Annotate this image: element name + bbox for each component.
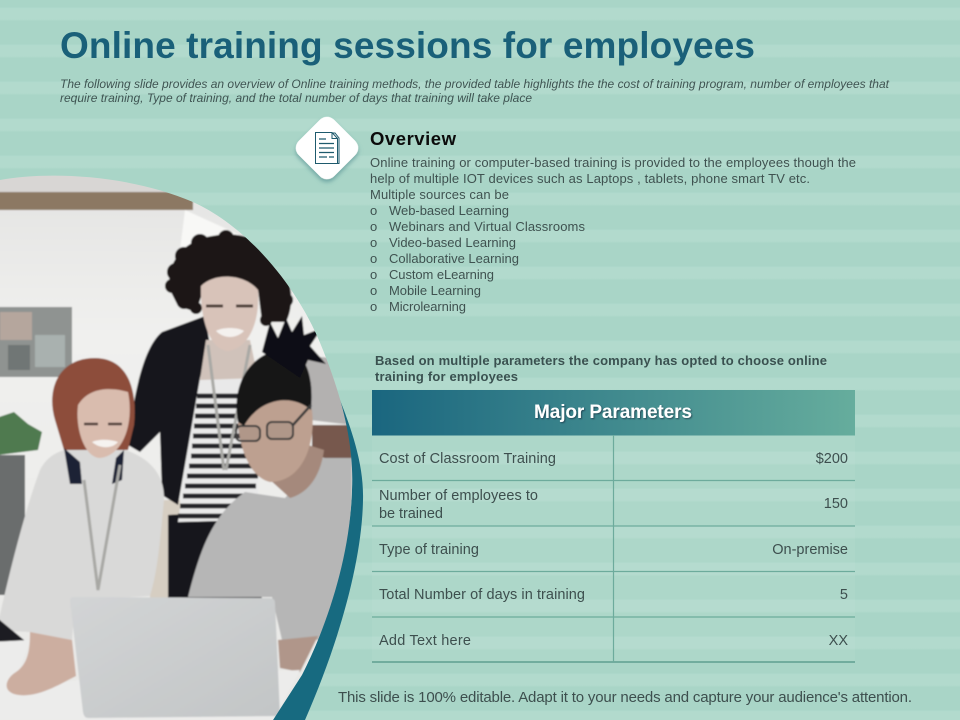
- subtitle description: [60, 77, 890, 105]
- overview text and source list: o: [370, 235, 377, 250]
- table row labels: [379, 451, 585, 649]
- overview text and source list: o: [370, 219, 377, 234]
- overview text and source list: o: [370, 203, 377, 218]
- table row values: 150: [824, 496, 848, 512]
- subtitle description: The following slide provides an overview of Online training methods, the provided table highlights the the cost of training program, number of employees that: [60, 77, 890, 91]
- table intro note: [375, 353, 827, 384]
- table row labels: Total Number of days in training: [379, 587, 585, 603]
- table header: Major Parameters: [534, 402, 692, 423]
- table row labels: be trained: [379, 506, 443, 522]
- overview text and source list: o: [370, 251, 377, 266]
- table row values: $200: [816, 451, 848, 467]
- table intro note: Based on multiple parameters the company has opted to choose online: [375, 353, 827, 368]
- parameters table: [372, 390, 855, 662]
- teal arc behind photo: [273, 395, 363, 720]
- table row labels: Add Text here: [379, 633, 471, 649]
- overview text and source list: o: [370, 267, 377, 282]
- table row values: On-premise: [772, 542, 848, 558]
- table row values: [772, 451, 848, 649]
- table and laptop: [0, 597, 300, 720]
- overview text and source list: Multiple sources can be: [370, 187, 509, 202]
- overview text and source list: help of multiple IOT devices such as Laptops , tablets, phone smart TV etc.: [370, 171, 810, 186]
- overview text and source list: Web-based Learning: [389, 203, 509, 218]
- overview text and source list: Webinars and Virtual Classrooms: [389, 219, 586, 234]
- standing woman: [128, 230, 293, 600]
- title: Online training sessions for employees: [60, 25, 755, 66]
- overview text and source list: o: [370, 283, 377, 298]
- overview text and source list: [370, 155, 856, 314]
- table header: [372, 390, 855, 436]
- overview text and source list: Custom eLearning: [389, 267, 494, 282]
- overview text and source list: Video-based Learning: [389, 235, 516, 250]
- overview heading: Overview: [370, 128, 457, 149]
- table row values: XX: [829, 633, 848, 649]
- overview text and source list: Mobile Learning: [389, 283, 481, 298]
- seated woman: [0, 358, 164, 648]
- table row labels: Type of training: [379, 542, 479, 558]
- overview text and source list: Microlearning: [389, 299, 466, 314]
- overview text and source list: o: [370, 299, 377, 314]
- overview text and source list: Online training or computer-based training is provided to the employees though the: [370, 155, 856, 170]
- footer note: This slide is 100% editable. Adapt it to your needs and capture your audience's attention.: [338, 689, 912, 706]
- overview icon: document in white diamond: [292, 113, 362, 183]
- table intro note: training for employees: [375, 369, 518, 384]
- photo: three colleagues at a laptop: [0, 165, 370, 720]
- subtitle description: require training, Type of training, and the total number of days that training will take place: [60, 91, 532, 105]
- table row values: 5: [840, 587, 848, 603]
- table row labels: Cost of Classroom Training: [379, 451, 556, 467]
- table row labels: Number of employees to: [379, 488, 538, 504]
- man in glasses: [188, 316, 352, 672]
- overview text and source list: Collaborative Learning: [389, 251, 519, 266]
